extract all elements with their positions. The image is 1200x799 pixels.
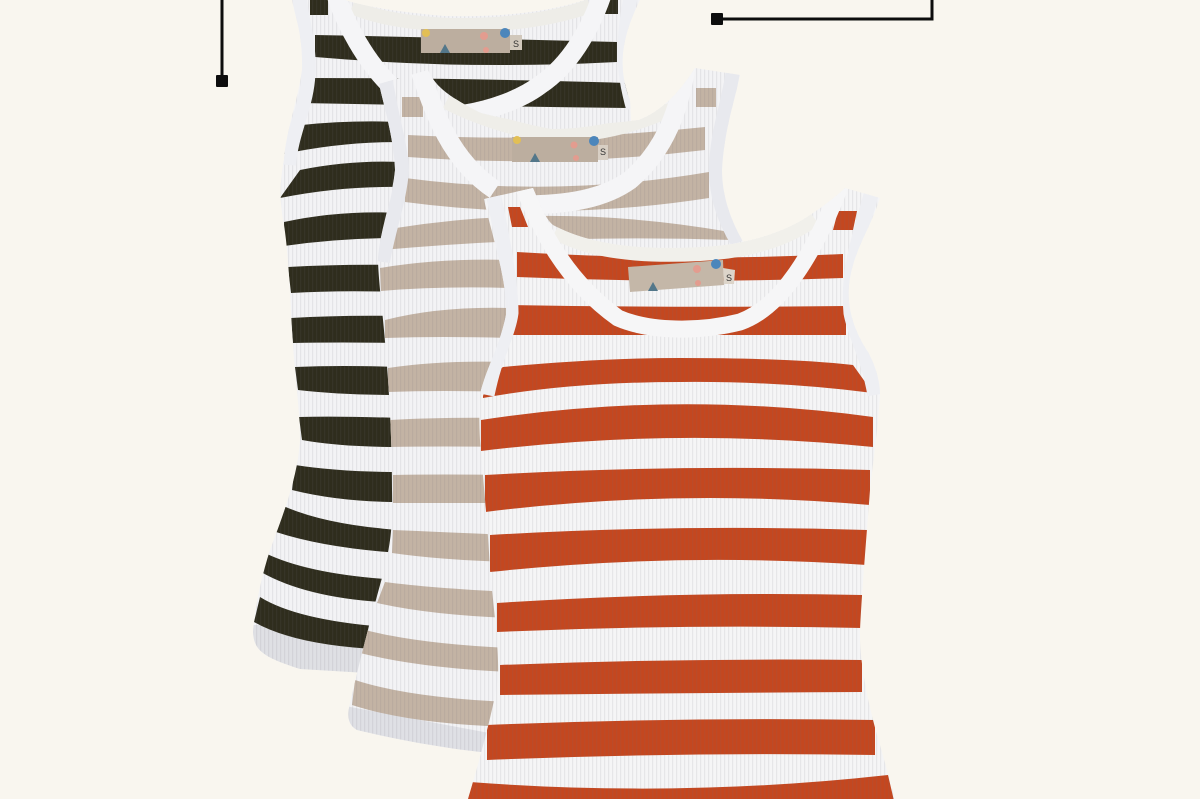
dark tank armholes <box>289 0 633 165</box>
tank top: orange stripes (front) <box>460 178 900 799</box>
tank top: beige stripes (middle) <box>340 60 760 760</box>
orange tank fabric and stripes <box>460 180 900 799</box>
beige tank fabric and stripes <box>340 60 760 760</box>
orange tank back neckline <box>555 219 815 255</box>
dark tank neck label <box>421 28 522 53</box>
beige tank neck label: S <box>600 147 606 157</box>
beige tank back neckline <box>446 102 682 136</box>
dark tank fabric and stripes <box>253 0 638 672</box>
callout line: left <box>216 0 228 87</box>
orange tank front neck band <box>520 178 843 329</box>
beige tank front neck band <box>417 60 687 205</box>
dark tank neck label: S <box>513 39 519 49</box>
orange tank neck label: S <box>726 273 732 283</box>
callout line: right <box>711 0 932 25</box>
beige tank armholes <box>383 66 738 262</box>
orange tank armholes <box>487 188 875 395</box>
orange tank neck label <box>628 259 735 292</box>
tank top: dark olive stripes (back) <box>253 0 638 672</box>
dark tank front neck band <box>336 0 602 114</box>
dark tank back neckline <box>352 6 590 25</box>
beige tank neck label <box>512 136 608 162</box>
